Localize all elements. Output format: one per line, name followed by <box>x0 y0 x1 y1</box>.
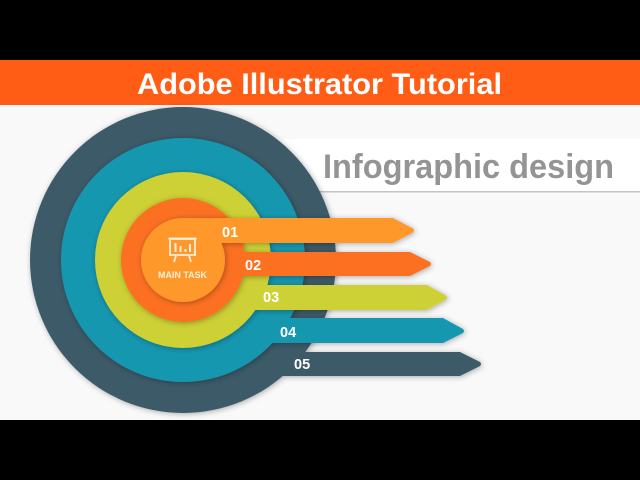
inner circle with arrow 01 <box>141 218 414 302</box>
label 02: 02 <box>245 258 261 274</box>
orange ring with arrow 02 <box>121 198 431 322</box>
label 01: 01 <box>222 225 238 241</box>
title banner <box>0 60 640 105</box>
subtitle band <box>180 139 640 192</box>
title banner: Adobe Illustrator Tutorial <box>137 68 502 101</box>
label 03: 03 <box>263 290 279 306</box>
label 04: 04 <box>280 325 296 341</box>
main task label: MAIN TASK <box>158 270 207 281</box>
label 05: 05 <box>294 357 310 373</box>
subtitle band: Infographic design <box>323 148 614 186</box>
outer ring with arrow 05 <box>30 107 481 413</box>
yellow ring with arrow 03 <box>95 172 447 348</box>
icon: presentation board <box>168 238 196 262</box>
teal ring with arrow 04 <box>61 138 464 382</box>
